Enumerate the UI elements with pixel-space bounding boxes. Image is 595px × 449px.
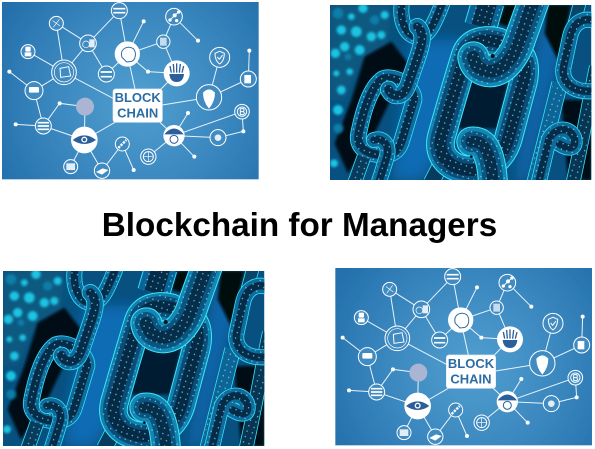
bottom-right image centre label: BLOCK CHAIN [446, 355, 496, 388]
top-left image centre label: BLOCK CHAIN [113, 89, 162, 122]
bottom-right image centre label: BLOCK CHAIN: BLOCK [448, 356, 495, 371]
top-left image: blockchain network [2, 2, 259, 179]
network icons [25, 9, 251, 175]
far chain strands [355, 2, 595, 183]
title: Blockchain for Managers [102, 207, 497, 244]
top-right image: glowing chain links [330, 0, 595, 190]
top-left image centre label: BLOCK CHAIN: CHAIN [117, 106, 158, 121]
top-left image centre label: BLOCK CHAIN: BLOCK [115, 90, 161, 105]
bottom-left image: glowing chain links [3, 266, 269, 449]
network nodes [7, 3, 256, 178]
bottom-right image centre label: BLOCK CHAIN: CHAIN [450, 372, 492, 387]
central large chain links [440, 0, 534, 190]
bottom-right image: blockchain network [335, 268, 592, 445]
